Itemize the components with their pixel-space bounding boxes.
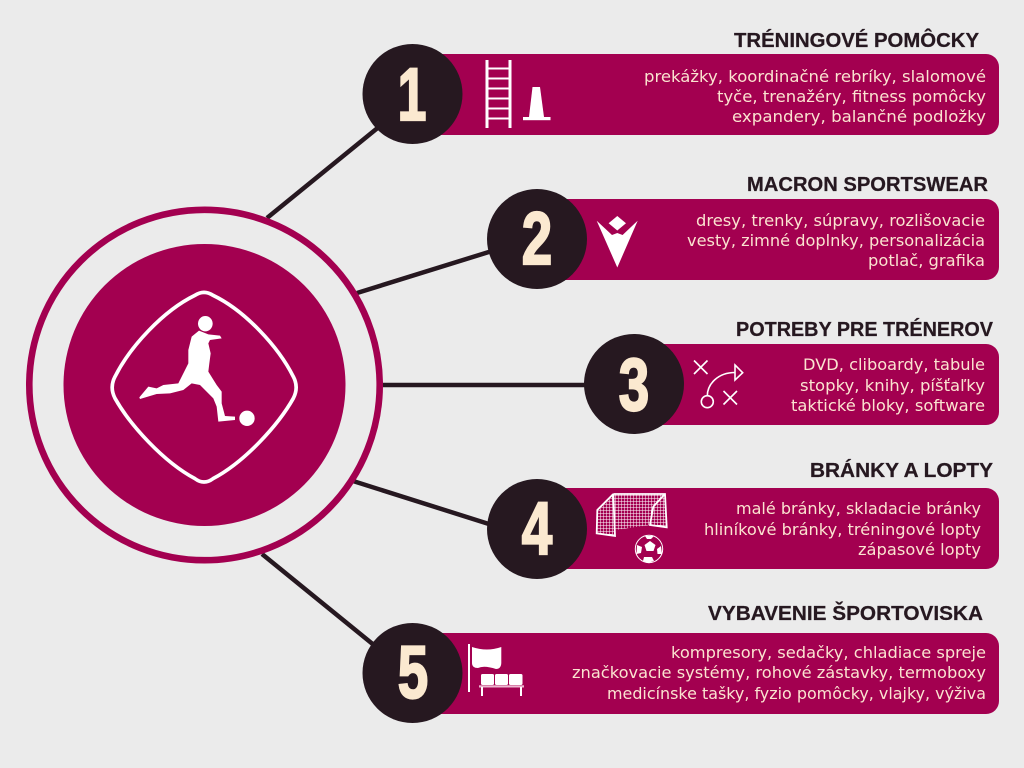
text block: tyče, trenažéry, fitness pomôcky (717, 87, 986, 106)
text block: vesty, zimné doplnky, personalizácia (687, 231, 985, 250)
text block (704, 499, 981, 559)
icon: soccer ball (635, 535, 663, 563)
heading: BRÁNKY A LOPTY (810, 459, 994, 482)
number badge 2 (487, 189, 587, 289)
number badge 5 (362, 623, 462, 723)
number badge 5: 5 (398, 631, 428, 714)
heading: POTREBY PRE TRÉNEROV (736, 318, 994, 341)
text block: dresy, trenky, súpravy, rozlišovacie (696, 211, 985, 230)
text block: potlač, grafika (868, 251, 985, 270)
text block: medicínske tašky, fyzio pomôcky, vlajky, výživa (607, 684, 986, 703)
connector lines (262, 126, 590, 650)
text block: prekážky, koordinačné rebríky, slalomové (644, 67, 986, 86)
panel: treningove pomocky (362, 28, 999, 144)
heading: MACRON SPORTSWEAR (747, 174, 989, 196)
icon: macron logo (597, 216, 638, 268)
text block: zápasové lopty (858, 540, 981, 559)
text block: stopky, knihy, píšťaľky (800, 376, 985, 395)
number badge 1: 1 (398, 53, 426, 136)
text block (644, 67, 986, 126)
panel: macron sportswear (487, 174, 999, 289)
text block: malé bránky, skladacie bránky (736, 499, 981, 518)
icon: ladder and cone (486, 60, 550, 128)
number badge 4: 4 (522, 487, 552, 570)
text block: expandery, balančné podložky (732, 107, 986, 126)
text block (791, 355, 985, 415)
bar (412, 54, 999, 135)
number badge 3 (584, 334, 684, 434)
central emblem (29, 210, 380, 560)
text block: značkovacie systémy, rohové zástavky, termoboxy (572, 663, 986, 682)
text block: kompresory, sedačky, chladiace spreje (671, 643, 986, 662)
icon: goal net (597, 494, 667, 536)
inner disc (64, 244, 346, 526)
number badge 1 (362, 44, 462, 144)
panel: potreby pre trenerov (584, 318, 999, 434)
bar (412, 633, 999, 714)
icon: football player in diamond (112, 292, 296, 482)
text block: DVD, cliboardy, tabule (803, 355, 985, 374)
outer ring (29, 210, 380, 560)
number badge 4 (487, 479, 587, 579)
panel: vybavenie sportoviska (362, 601, 999, 723)
text block (572, 643, 986, 703)
text block: taktické bloky, software (791, 396, 985, 415)
bar (537, 488, 999, 569)
text block (687, 211, 985, 270)
panel: branky a lopty (487, 459, 999, 579)
heading: VYBAVENIE ŠPORTOVISKA (708, 601, 983, 625)
number badge 3: 3 (619, 343, 649, 426)
text block: hliníkové bránky, tréningové lopty (704, 520, 981, 539)
bar (537, 199, 999, 280)
icon: tactics diagram (694, 360, 743, 408)
icon: flag and bench (468, 644, 524, 696)
bar (634, 344, 999, 425)
number badge 2: 2 (522, 197, 552, 280)
heading: TRÉNINGOVÉ POMÔCKY (734, 28, 980, 52)
